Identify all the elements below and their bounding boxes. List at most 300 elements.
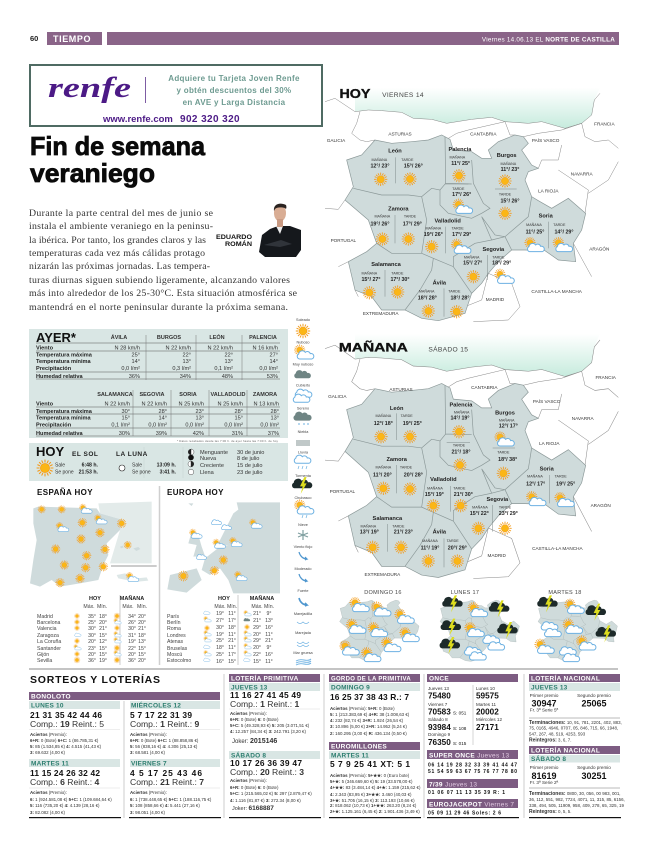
forecast: Soria: MAÑANA: [527, 474, 543, 479]
forecast: León: TARDE: [401, 414, 413, 418]
table: Europe cities: 29°: [253, 625, 261, 631]
table values 1: 25°: [132, 352, 140, 358]
title: veraniego: [30, 158, 155, 188]
map: tomorrow: NAVARRA: [572, 416, 594, 421]
table values 2: 23°: [196, 409, 204, 415]
forecast: Salamanca: 21°/ 23°: [394, 530, 413, 536]
panel: ONCE: [427, 674, 519, 818]
mini map: Lunes 17: [440, 590, 519, 661]
legend: weather symbols: [292, 318, 314, 665]
panel: Bonoloto: BONOLOTO: [31, 694, 71, 700]
table: Europe cities: 11°: [228, 632, 236, 638]
table: Europe cities: 16°: [265, 652, 273, 658]
forecast: Soria: 12°/ 17°: [526, 481, 545, 487]
map: Europe: [167, 502, 280, 593]
table values 1: 14°: [270, 359, 278, 365]
panel: Euromillones: [329, 742, 421, 818]
icon: sun: [37, 460, 53, 476]
table: Europe cities: MAÑANA: [250, 595, 274, 602]
forecast: Ávila: TARDE: [448, 289, 461, 293]
table: Europe cities: Atenas: [167, 639, 184, 645]
forecast: Salamanca: TARDE: [392, 525, 405, 529]
map: tomorrow: MAÑANA: [339, 339, 408, 354]
Bonoloto: Martes 11: [29, 759, 121, 818]
map: today: HOY: [339, 87, 371, 101]
table: Spain cities: 20°: [138, 658, 146, 664]
table values 2: N 25 km/h: [178, 402, 204, 408]
panel: Euromillones: 4+★★: 83 (3.484,14 €) 4+★: 1.159 (215,62 €): [330, 785, 421, 790]
panel: Gordo de la Primitiva: DOMINGO 9: [331, 684, 370, 692]
legend: viento flojo: [294, 545, 312, 560]
table values 2: 30%: [119, 431, 130, 437]
table: Spain cities: 20°: [88, 639, 96, 645]
table: Europe cities: Mín.: [264, 604, 274, 610]
forecast: Valladolid: [425, 477, 473, 512]
forecast: Valladolid: Valladolid: [430, 477, 457, 483]
Bonoloto: Miércoles 12: 5: 56 (838,16 €) 4: 4.306 (25,13 €): [130, 744, 198, 749]
table: Europe cities: 20°: [253, 645, 261, 651]
legend: soleado: [296, 318, 310, 338]
table: Spain cities: 20°: [138, 620, 146, 626]
table: Europe cities: Roma: [167, 626, 181, 632]
forecast: Segovia: 23°/ 29°: [499, 511, 518, 517]
table: Spain cities: MAÑANA: [120, 595, 144, 602]
table: Europe cities: Moscú: [167, 652, 182, 658]
table: Europe cities: Máx.: [251, 604, 263, 610]
table: Spain cities: Madrid: [37, 614, 53, 620]
forecast: Zamora: 17°/ 29°: [403, 221, 422, 227]
Bonoloto: Miércoles 12: 3: 68.581 (4,00 €): [130, 750, 165, 755]
Primitiva: Jueves 13: 5+C: 5 (49.328,93 €) 5: 205 (3.071,51 €): [230, 723, 310, 728]
table values 2: 28°: [271, 409, 279, 415]
map: today: FRANCIA: [594, 121, 615, 126]
table: Europe cities: Mín.: [227, 604, 237, 610]
Bonoloto: Miércoles 12: 5 7 17 22 31 39: [130, 710, 192, 720]
table values 1: 0,1 l/m²: [214, 366, 233, 372]
panel: Lotería Nacional sábado: 30251: [581, 771, 607, 781]
forecast: Valladolid: MAÑANA: [426, 225, 442, 230]
Primitiva: Sábado 8: Comp.: 20 Reint.: 3: [230, 767, 304, 777]
forecast: León: TARDE: [401, 158, 414, 162]
forecast: Salamanca: TARDE: [391, 271, 404, 275]
forecast: Valladolid: MAÑANA: [427, 485, 443, 490]
map: tomorrow: SÁBADO 15: [428, 344, 468, 353]
table: Europe cities: 21°: [228, 638, 236, 644]
forecast: León: 19°/ 25°: [403, 421, 422, 427]
forecast: León: 12°/ 18°: [374, 421, 393, 427]
map: tomorrow: PAÍS VASCO: [533, 398, 561, 404]
body text: Durante la parte central del mes de junio se: [29, 208, 214, 219]
table header row 1: [111, 333, 277, 341]
Primitiva: Sábado 8: 10 17 26 36 39 47: [230, 758, 302, 768]
Super ONCE numbers: 06 14 19 28 32 33 39 41 44 47: [428, 762, 517, 768]
panel: Lotería Nacional jueves: [529, 674, 622, 744]
forecast: Zamora: TARDE: [400, 466, 413, 470]
table values 2: N 25 km/h: [218, 402, 243, 408]
table: Spain cities: 15°: [99, 646, 107, 652]
table: Spain cities: 13°: [138, 639, 146, 645]
panel: HOY sun and moon: LA LUNA: [116, 451, 148, 458]
table: Spain cities: Gijón: [37, 652, 49, 658]
panel: ONCE: Miércoles 12: [476, 717, 502, 722]
moon phases: 23 de julio: [237, 470, 263, 476]
table values 1: 36%: [129, 374, 140, 380]
panel: Lotería Nacional sábado: LOTERÍA NACIONAL: [531, 746, 600, 754]
panel: ONCE: Viernes 7: [428, 702, 448, 707]
forecast: Segovia: 18°/ 29°: [492, 260, 511, 266]
forecast: Burgos: 11°/ 23°: [501, 167, 519, 173]
table: Europe cities: 25°: [216, 638, 224, 644]
forecast: Segovia: Segovia: [482, 247, 505, 253]
table values 2: 0,0 l/m²: [148, 422, 167, 428]
forecast: Ávila: MAÑANA: [419, 288, 435, 293]
panel: Gordo de la Primitiva: 16 25 37 38 43 R.: 7: [330, 692, 409, 702]
table values 2: 30°: [122, 409, 130, 415]
table header row 2: [97, 392, 277, 398]
table values 2: 13°: [196, 416, 204, 422]
table: Europe cities: 13°: [265, 618, 273, 624]
Primitiva: Sábado 8: [229, 750, 321, 818]
table: Spain cities: 21°: [138, 626, 146, 632]
table values 1: N 16 km/h: [252, 346, 278, 352]
panel: Lotería Nacional sábado: SÁBADO 8: [531, 754, 566, 763]
legend: niebla: [296, 430, 310, 445]
table: Spain cities: 22°: [128, 646, 136, 652]
panel: ONCE: 59575: [476, 692, 499, 700]
legend: marejadilla: [294, 612, 313, 624]
table: Europe cities: 9°: [267, 611, 271, 617]
forecast: Segovia: 15°/ 27°: [463, 260, 482, 266]
forecast: Burgos: MAÑANA: [499, 418, 515, 423]
forecast: León: León: [390, 406, 404, 412]
title: [30, 131, 206, 188]
moon phases: 30 de junio: [237, 450, 264, 456]
title: AYER: AYER*: [36, 330, 77, 345]
moonrise and moonset times: Se pone: [132, 470, 151, 476]
panel: Lotería Primitiva: LOTERÍA PRIMITIVA: [231, 674, 299, 682]
forecast: Soria: 11°/ 25°: [526, 229, 544, 235]
ad: renfe banner: y obtén descuentos del 30%: [177, 86, 291, 95]
forecast: Zamora: 11°/ 20°: [373, 472, 392, 478]
table values 1: 0,3 l/m²: [172, 366, 191, 372]
legend: tormenta: [292, 474, 312, 494]
sunrise and sunset times: 21:53 h.: [79, 470, 99, 476]
header band with date: Viernes 14.06.13 EL NORTE DE CASTILLA: [482, 36, 615, 44]
table values 2: 37%: [268, 431, 279, 437]
table row labels 2: Viento: [36, 402, 54, 408]
table: Europe cities: París: [167, 614, 180, 620]
outlook: Sunday to Tuesday mini maps: [339, 590, 617, 662]
table: Spain cities: [37, 595, 238, 665]
map: tomorrow: ASTURIAS: [389, 387, 413, 392]
author photo: [259, 204, 301, 257]
forecast: Salamanca: Salamanca: [371, 262, 402, 268]
forecast: Valladolid: 21°/ 30°: [454, 492, 473, 498]
panel: Euromillones: EUROMILLONES: [331, 744, 387, 750]
table values 2: 42%: [193, 431, 204, 437]
Bonoloto: Lunes 10: [29, 701, 120, 755]
forecast: Soria: TARDE: [553, 223, 566, 227]
panel: Lotería Nacional sábado: Segundo premio: [577, 765, 611, 770]
forecast: Ávila: MAÑANA: [422, 538, 438, 543]
legend: moderado: [294, 567, 312, 582]
forecast: Zamora: [373, 457, 423, 496]
forecast: Burgos: MAÑANA: [501, 161, 517, 166]
table values 1: [114, 346, 278, 380]
panel: Lotería Nacional jueves: 25065: [581, 698, 607, 708]
forecast: Zamora: 19°/ 26°: [370, 221, 390, 227]
ad: renfe banner: renfe: [48, 72, 131, 104]
mini map: Martes 18: MARTES 18: [548, 590, 582, 596]
legend: mar gruesa: [293, 651, 313, 665]
legend: fuerte: [298, 589, 308, 606]
mini map: Lunes 17: LUNES 17: [451, 590, 479, 596]
map: today: PORTUGAL: [331, 238, 357, 243]
panel: Lotería Nacional jueves: Primer premio: [530, 693, 559, 698]
forecast: Burgos: Burgos: [497, 153, 517, 159]
band: Super ONCE: SUPER ONCE Jueves 13: [429, 752, 510, 760]
moon phases: 8 de julio: [237, 456, 259, 462]
map: today: VIERNES 14: [382, 92, 424, 99]
panel: Lotería Nacional jueves: 30947: [531, 698, 557, 708]
table: Europe cities: 20°: [253, 632, 261, 638]
forecast: Soria: 14°/ 29°: [554, 229, 574, 235]
table: Spain cities: 15°: [99, 633, 107, 639]
table: Spain cities: 15°: [99, 652, 107, 658]
moonrise and moonset times: Sale: [132, 462, 142, 468]
map: tomorrow: ARAGÓN: [591, 502, 611, 508]
table: Spain cities: Zaragoza: [37, 633, 59, 639]
table values 2: [104, 402, 279, 437]
Bonoloto: Viernes 7: 5: 108 (858,66 €) 4: 5.441 (27,16 €): [130, 803, 200, 808]
panel: ONCE: 75480: [428, 692, 451, 700]
table: Europe cities: 30°: [216, 625, 224, 631]
table header row 1: ÁVILA: [111, 334, 127, 341]
table values 1: 53%: [267, 374, 278, 380]
forecast: Ávila: [418, 279, 470, 318]
forecast: Zamora: MAÑANA: [376, 465, 392, 470]
panel: Lotería Nacional jueves: 547, 267, 48, 519, 4253, 593: [529, 732, 586, 736]
table: Europe cities: 21°: [265, 638, 273, 644]
table row labels 2: Temperatura máxima: [36, 409, 93, 415]
table: Europe cities: Máx.: [214, 604, 226, 610]
forecast: Valladolid: TARDE: [452, 226, 464, 230]
table values 2: 15°: [235, 416, 243, 422]
table: Europe cities: 18°: [228, 625, 236, 631]
table: Spain cities: 23°: [88, 646, 96, 652]
Primitiva: Jueves 13: [229, 683, 320, 745]
body text: instala el ambiente veraniego en la peninsu-: [29, 221, 213, 232]
legend: mar gruesa: Mar gruesa: [293, 651, 313, 655]
moon phases: 15 de julio: [237, 463, 263, 469]
table: Spain cities: 15°: [138, 646, 146, 652]
Primitiva: Jueves 13: 6+R: 0 (Bote) 6: 0 (Bote): [230, 717, 279, 722]
panel: Gordo de la Primitiva: 5: 1 (213.383,69 €) 4+R: 38 (1.008,63 €): [330, 712, 410, 717]
table: Europe cities: [167, 595, 274, 665]
Bonoloto: Lunes 10: 3: 69.632 (4,00 €): [30, 750, 65, 755]
table header row 1: BURGOS: [157, 335, 181, 341]
legend: moderado: Moderado: [294, 567, 312, 571]
panel: Euromillones: 2+★: 1.125.161 (6,45 €) 2: 1.901.436 (3,49 €): [330, 809, 420, 814]
forecast: Palencia: TARDE: [452, 187, 465, 191]
table: Europe cities: 11°: [265, 632, 273, 638]
forecast: Salamanca: 15°/ 27°: [361, 277, 381, 283]
legend: fuerte: Fuerte: [298, 589, 308, 593]
Primitiva: Sábado 8: 4: 1.116 (81,87 €) 3: 272.34 (8,00 €): [230, 798, 301, 803]
legend: chubasco: Chubasco: [294, 496, 312, 500]
Primitiva: Jueves 13: Joker: 2015146: [232, 738, 277, 745]
Bonoloto: Viernes 7: VIERNES 7: [131, 760, 167, 768]
forecast: Salamanca: MAÑANA: [362, 270, 378, 275]
Eurojackpot numbers: 05 09 11 29 46 Soles: 2 6: [428, 810, 501, 816]
forecast: Ávila: TARDE: [447, 539, 459, 543]
table: Spain cities: 25°: [88, 620, 96, 626]
Bonoloto: Martes 11: Comp.: 6 Reint.: 4: [30, 777, 100, 787]
legend: tormenta: Tormenta: [295, 474, 312, 478]
table values 2: 28°: [159, 409, 167, 415]
panel: Euromillones: 4: 2.343 (83,95 €) 3+★★: 3.460 (40,03 €): [330, 792, 412, 797]
Primitiva: Sábado 8: Aciertos (Premio):: [230, 778, 267, 783]
forecast: Palencia: Palencia: [449, 147, 472, 153]
forecast: Valladolid: TARDE: [453, 486, 466, 490]
forecast: Ávila: 18°/ 28°: [450, 295, 470, 301]
table: Spain cities: La Coruña: [37, 639, 61, 645]
table values 2: N 22 km/h: [104, 402, 130, 408]
table: Spain cities: 30°: [88, 626, 96, 632]
Bonoloto: Miércoles 12: MIÉRCOLES 12: [131, 700, 181, 710]
heading: España hoy: ESPAÑA HOY: [37, 488, 93, 497]
table: Spain cities: 20°: [99, 620, 107, 626]
band: Eurojackpot: [427, 799, 518, 808]
forecast: Soria: [524, 214, 574, 252]
panel: Gordo de la Primitiva: GORDO DE LA PRIMITIVA: [331, 676, 411, 682]
mini map: Domingo 16: [339, 590, 419, 662]
moon phases: Creciente: [200, 463, 224, 469]
Bonoloto: Martes 11: 6: 1 (924.581,08 €) 5+C: 1 (109.684,64 €): [30, 797, 112, 802]
ad: renfe banner: www.renfe.com: [102, 114, 173, 125]
table row labels 2: Humedad relativa: [36, 431, 84, 437]
table: Europe cities: 17°: [228, 652, 236, 658]
panel: AYER table: [29, 329, 288, 438]
Bonoloto: Viernes 7: [129, 759, 221, 818]
table values 1: 0,0 l/m²: [259, 366, 278, 372]
forecast: Salamanca: [360, 516, 413, 554]
forecast: Soria: [526, 466, 575, 507]
forecast: Palencia: MAÑANA: [454, 410, 470, 415]
table values 2: N 13 km/h: [254, 402, 279, 408]
table: Spain cities: Barcelona: [37, 620, 60, 626]
Bonoloto: Lunes 10: Comp.: 19 Reint.: 5: [30, 719, 104, 729]
table row labels 1: Viento: [36, 346, 54, 352]
table values 1: 13°: [225, 359, 233, 365]
table: Spain cities: 20°: [128, 652, 136, 658]
footnote: * Datos recabados desde las 7:00 h. de ayer hasta las 7:00 h. de hoy: [177, 439, 279, 443]
legend: nieve: [298, 523, 308, 540]
Bonoloto: Martes 11: 11 15 24 26 32 42: [30, 768, 100, 778]
table: Europe cities: 16°: [216, 659, 224, 665]
heading: Europa hoy: EUROPA HOY: [167, 488, 224, 497]
panel: ONCE: Sábado 8: [428, 717, 448, 722]
map: tomorrow: EXTREMADURA: [364, 572, 401, 577]
legend: cubierto: [293, 384, 312, 402]
legend: chubasco: [294, 496, 314, 518]
panel: Euromillones: 2: 818.062 (10,73 €) 1+★★: 263.20 (8,24 €): [330, 803, 417, 808]
table header row 2: SORIA: [179, 392, 197, 398]
moonrise and moonset times: 13:09 h.: [157, 462, 177, 468]
forecast: Burgos: TARDE: [499, 192, 512, 196]
ad: renfe banner: Adquiere tu Tarjeta Joven Renfe: [168, 74, 300, 83]
panel: Gordo de la Primitiva: 3: 10.896 (5,00 €) 2+R: 14.952 (5,24 €): [330, 724, 407, 729]
table: Europe cities: 19°: [216, 632, 224, 638]
forecast: Zamora: Zamora: [386, 457, 408, 463]
heading: Sorteos y loterías: SORTEOS Y LOTERÍAS: [30, 673, 160, 686]
table values 1: 34%: [180, 374, 191, 380]
Bonoloto: Martes 11: 5: 116 (735,20 €) 4: 4.139 (28,16 €): [30, 803, 100, 808]
map: today: GALICIA: [327, 138, 346, 143]
icon: moon: [119, 465, 125, 471]
legend: muy nuboso: Muy nuboso: [293, 362, 313, 366]
Primitiva: Jueves 13: 4: 12.257 (84,34 €) 3: 242.791 (3,20 €): [230, 729, 306, 734]
ad: renfe banner: 902 320 320: [180, 114, 240, 125]
panel: HOY sun and moon: [29, 443, 288, 481]
Bonoloto: Martes 11: 3: 82.082 (4,00 €): [30, 810, 65, 815]
panel: ONCE: 93984 S: 108: [428, 723, 467, 732]
table: Spain cities: 20°: [138, 614, 146, 620]
table: Spain cities: 19°: [128, 639, 136, 645]
map: today: CASTILLA-LA MANCHA: [531, 289, 583, 294]
body text: la ibérica. Por tanto, los grandes claros y las: [29, 235, 206, 246]
table header row 2: SEGOVIA: [139, 392, 165, 398]
forecast: Palencia: MAÑANA: [450, 154, 466, 159]
table: Spain cities: 18°: [138, 633, 146, 639]
forecast: Burgos: 18°/ 38°: [498, 457, 517, 463]
Bonoloto: Miércoles 12: Comp.: 1 Reint.: 9: [130, 719, 200, 729]
table: Europe cities: 11°: [265, 659, 273, 665]
panel: Lotería Nacional sábado: 81619: [531, 771, 557, 781]
forecast: Ávila: 18°/ 28°: [418, 295, 437, 301]
forecast: Salamanca: Salamanca: [373, 516, 403, 522]
table: Europe cities: 11°: [228, 611, 236, 617]
forecast: Palencia: 14°/ 19°: [450, 415, 470, 421]
panel: Lotería Nacional sábado: Fr. 3ª Serie 2ª: [530, 780, 559, 785]
Super ONCE numbers: [428, 762, 517, 775]
band: 7/39: 7/39 Jueves 13: [429, 782, 477, 788]
legend: cubierto: Cubierto: [296, 384, 310, 388]
table: Europe cities: 19°: [216, 611, 224, 617]
forecast: Ávila: Ávila: [433, 528, 447, 535]
section tag: TIEMPO: [47, 32, 102, 45]
band: Eurojackpot: EUROJACKPOT Viernes 7: [429, 802, 514, 808]
legend: niebla: Niebla: [298, 430, 309, 434]
table: Spain cities: Santander: [37, 646, 61, 652]
forecast: Soria: MAÑANA: [526, 222, 542, 227]
table: Europe cities: 25°: [216, 652, 224, 658]
table row labels 2: Precipitación: [36, 422, 72, 428]
panel: Euromillones: Aciertos (Premio): 5+★★: 0 (Euro bote): [330, 773, 410, 778]
Primitiva: Jueves 13: 11 16 27 41 45 49: [230, 690, 301, 700]
legend: lluvia: Lluvia: [298, 450, 309, 454]
Super ONCE numbers: 51 54 59 63 67 75 76 77 78 80: [428, 769, 517, 775]
Bonoloto: Lunes 10: LUNES 10: [31, 702, 64, 710]
forecast: Palencia: TARDE: [453, 444, 466, 448]
map: today: CANTABRIA: [470, 131, 497, 136]
table: Spain cities: 15°: [138, 652, 146, 658]
table: Spain cities: Máx.: [83, 604, 95, 610]
panel: ONCE: Martes 11: [476, 702, 497, 707]
section tag: TIEMPO: TIEMPO: [53, 34, 91, 44]
panel: Lotería Nacional jueves: JUEVES 13: [531, 684, 568, 692]
panel: ONCE: 70583 S: 051: [428, 708, 467, 716]
